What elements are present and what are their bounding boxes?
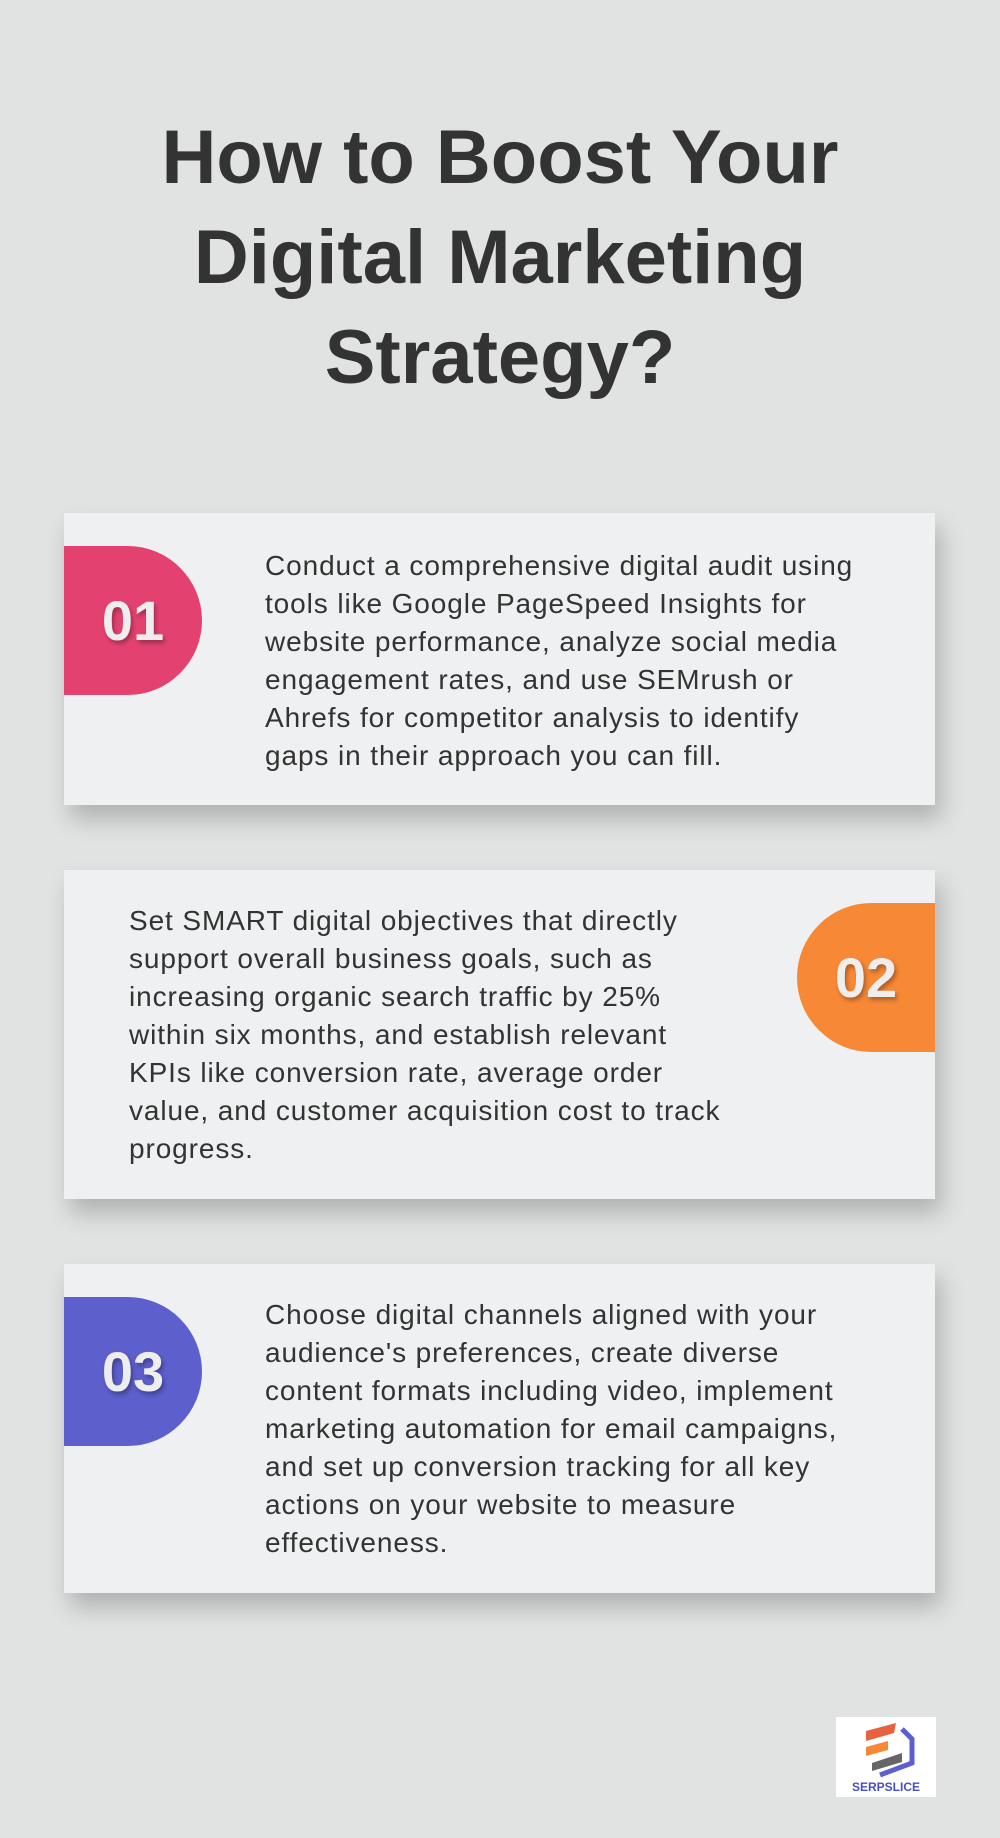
logo: SERPSLICE [852, 1780, 920, 1794]
text 03: effectiveness. [265, 1527, 448, 1558]
text 01: Conduct a comprehensive digital audit using [265, 550, 853, 581]
text 01: tools like Google PageSpeed Insights for [265, 588, 807, 619]
badge 02 [797, 903, 935, 1052]
text 01: Ahrefs for competitor analysis to identify [265, 702, 799, 733]
text 02: KPIs like conversion rate, average order [129, 1057, 663, 1088]
title: Digital Marketing [194, 215, 806, 300]
text 03: content formats including video, implement [265, 1375, 834, 1406]
text 01 [265, 550, 853, 771]
badge 03: 03 [102, 1340, 164, 1403]
text 03: marketing automation for email campaigns, [265, 1413, 837, 1444]
title: How to Boost Your [162, 115, 838, 200]
text 02: support overall business goals, such as [129, 943, 653, 974]
badge 01 [64, 546, 202, 695]
text 03 [265, 1299, 837, 1558]
panel: step 03 [64, 1264, 935, 1593]
text 02: within six months, and establish relevant [129, 1019, 667, 1050]
text 02: progress. [129, 1133, 254, 1164]
text 03: and set up conversion tracking for all key [265, 1451, 810, 1482]
badge 02: 02 [835, 946, 897, 1009]
title [162, 115, 838, 400]
text 02: increasing organic search traffic by 25% [129, 981, 661, 1012]
logo [836, 1717, 936, 1797]
text 02: value, and customer acquisition cost to track [129, 1095, 720, 1126]
text 01: website performance, analyze social media [265, 626, 837, 657]
text 01: gaps in their approach you can fill. [265, 740, 722, 771]
text 03: Choose digital channels aligned with your [265, 1299, 817, 1330]
text 02 [129, 905, 720, 1164]
panel: step 01 [64, 513, 935, 805]
text 03: actions on your website to measure [265, 1489, 736, 1520]
badge 01: 01 [102, 589, 164, 652]
text 03: audience's preferences, create diverse [265, 1337, 779, 1368]
text 02: Set SMART digital objectives that directly [129, 905, 678, 936]
title: Strategy? [325, 315, 675, 400]
badge 03 [64, 1297, 202, 1446]
panel: step 02 [64, 870, 935, 1199]
text 01: engagement rates, and use SEMrush or [265, 664, 794, 695]
